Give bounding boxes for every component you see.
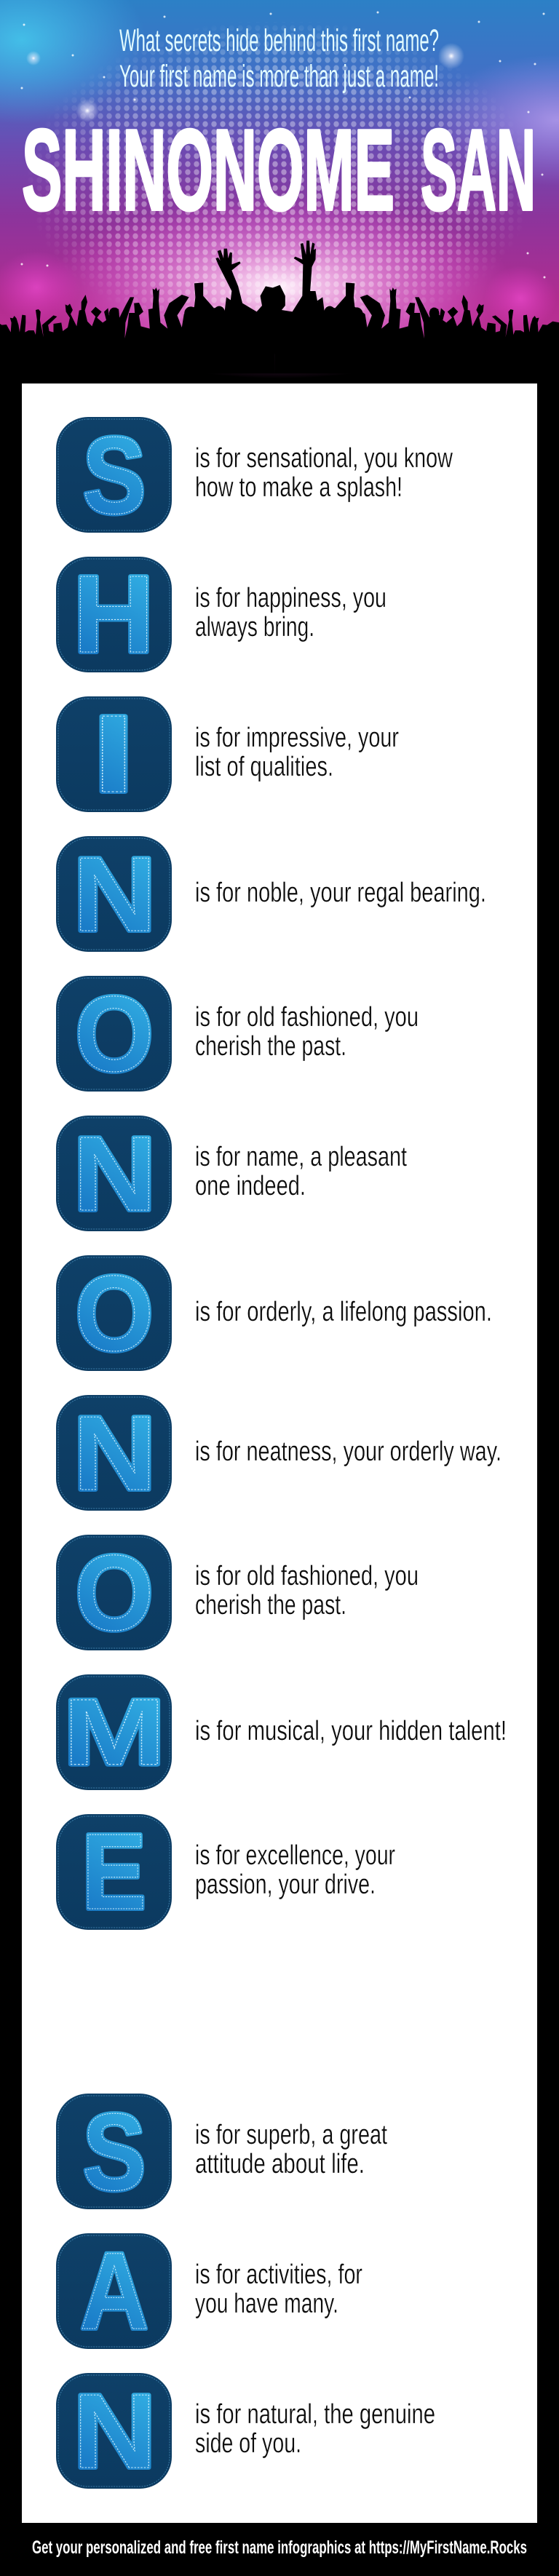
row: H happiness: [56, 552, 386, 675]
icon: letter S: S: [83, 414, 146, 536]
icon: letter O: O: [75, 1534, 154, 1653]
icon: letter M: [56, 1674, 172, 1790]
row: E excellence: [56, 1812, 395, 1932]
icon: letter N: N: [73, 1115, 156, 1233]
icon: letter H: H: [73, 552, 154, 675]
row: I impressive: [56, 692, 399, 815]
text: cherish the past.: [195, 1031, 346, 1062]
icon: letter O: O: [75, 1255, 154, 1374]
text: always bring.: [195, 612, 314, 643]
icon: letter N: [56, 1394, 172, 1512]
text: [195, 443, 453, 503]
crowd silhouette: [0, 241, 559, 373]
row: S sensational: [56, 414, 453, 536]
text: attitude about life.: [195, 2149, 365, 2179]
text: [195, 1840, 395, 1900]
text: is for old fashioned, you: [195, 1002, 419, 1033]
text: is for sensational, you know: [195, 443, 453, 474]
icon: letter S: [56, 414, 172, 536]
icon: letter N: N: [73, 835, 156, 953]
text: you have many.: [195, 2289, 338, 2319]
text: is for natural, the genuine: [195, 2399, 435, 2430]
row: A activities: [56, 2230, 362, 2352]
icon: letter A: A: [80, 2230, 148, 2352]
icon: letter O: O: [75, 975, 154, 1094]
icon: letter O: O: [75, 1534, 154, 1653]
text: list of qualities.: [195, 752, 333, 782]
icon: letter N: [56, 2372, 172, 2490]
icon: letter N: N: [73, 1115, 156, 1233]
icon: letter E: E: [82, 1812, 146, 1932]
icon: letter H: [56, 552, 172, 675]
text: is for superb, a great: [195, 2120, 387, 2150]
icon: letter I: I: [92, 692, 135, 815]
icon: letter N: N: [73, 1394, 156, 1512]
row: O old fashioned second: [56, 1534, 419, 1653]
text: is for name, a pleasant: [195, 1142, 407, 1172]
subtitle text: [119, 23, 439, 94]
icon: letter N: N: [73, 1394, 156, 1512]
row: M musical: [56, 1674, 507, 1790]
icon: letter O: O: [75, 975, 154, 1094]
text: how to make a splash!: [195, 472, 403, 503]
row: N natural: [56, 2372, 435, 2490]
icon: letter S: S: [83, 414, 146, 536]
text: [195, 1561, 419, 1621]
icon: letter N: [56, 835, 172, 953]
icon: letter A: A: [80, 2230, 148, 2352]
icon: letter N: N: [73, 2372, 156, 2490]
text: [195, 2120, 387, 2179]
text: one indeed.: [195, 1171, 306, 1201]
icon: letter I: [56, 692, 172, 815]
text: [195, 2259, 362, 2319]
row: N noble: [56, 835, 486, 953]
white content panel: [22, 383, 537, 2523]
row: N name: [56, 1115, 407, 1233]
icon: letter S: S: [83, 2091, 146, 2213]
icon: letter M: M: [63, 1680, 166, 1785]
text: [195, 2399, 435, 2459]
icon: letter N: N: [73, 2372, 156, 2490]
icon: letter E: [56, 1812, 172, 1932]
text: is for impressive, your: [195, 723, 399, 753]
text: is for happiness, you: [195, 583, 386, 613]
row: S superb: [56, 2091, 387, 2213]
text: passion, your drive.: [195, 1869, 376, 1900]
text: is for activities, for: [195, 2259, 362, 2290]
text: is for old fashioned, you: [195, 1561, 419, 1591]
text: side of you.: [195, 2428, 301, 2459]
icon: letter I: I: [92, 692, 135, 815]
icon: letter A: [56, 2230, 172, 2352]
icon: letter E: E: [82, 1812, 146, 1932]
text: [195, 1002, 419, 1062]
icon: letter O: O: [75, 1255, 154, 1374]
row: O old fashioned: [56, 975, 419, 1094]
icon: letter S: S: [83, 2091, 146, 2213]
row: O orderly: [56, 1255, 492, 1374]
header banner: concert background: [0, 0, 559, 378]
text: [195, 723, 399, 782]
icon: letter N: [56, 1115, 172, 1233]
text: cherish the past.: [195, 1590, 346, 1621]
text: is for excellence, your: [195, 1840, 395, 1871]
icon: letter H: H: [73, 552, 154, 675]
icon: letter N: N: [73, 835, 156, 953]
row: N neatness: [56, 1394, 501, 1512]
text: [195, 583, 386, 643]
icon: letter S: [56, 2091, 172, 2213]
icon: letter M: M: [63, 1680, 166, 1785]
text: [195, 1142, 407, 1201]
